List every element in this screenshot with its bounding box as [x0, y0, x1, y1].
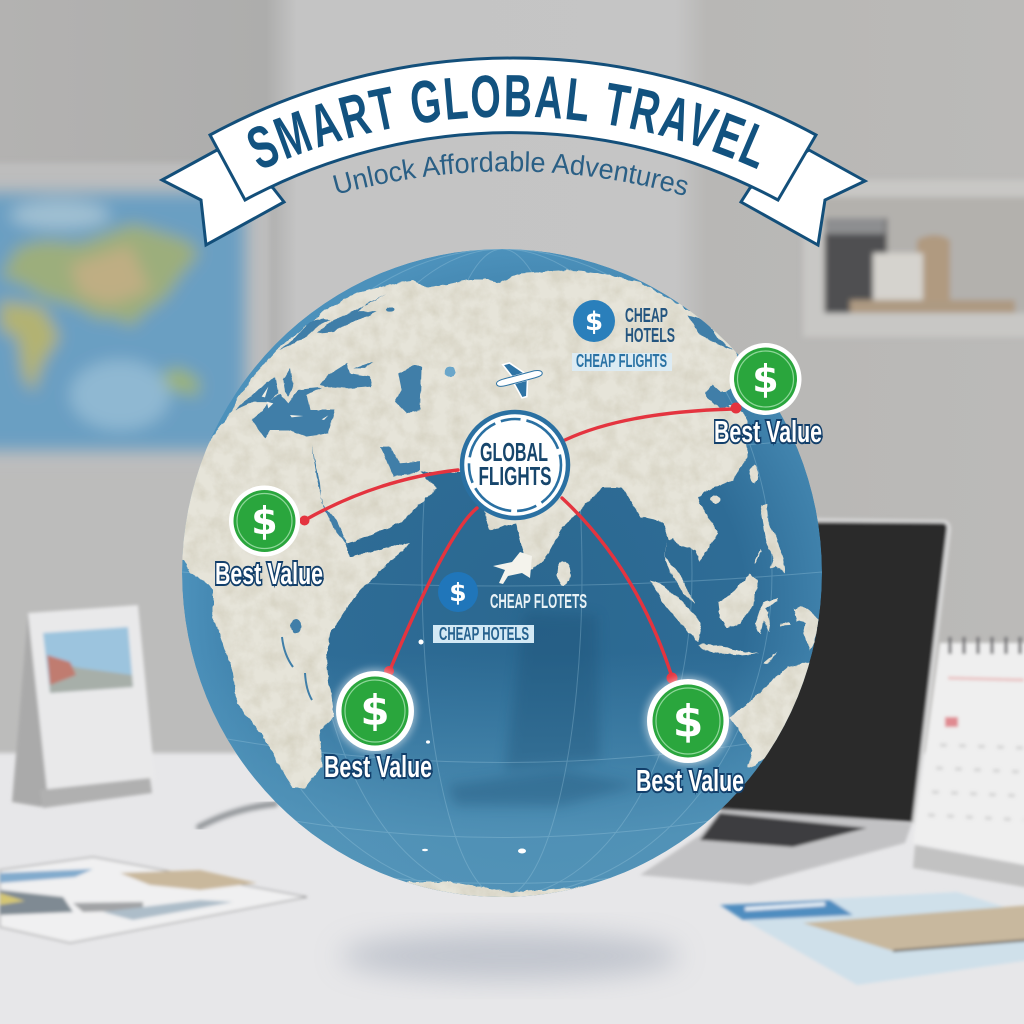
best value marker: Australia	[636, 677, 744, 798]
Africa, Europe and Asia	[150, 270, 747, 788]
upper cheap hotels callout: CHEAP	[625, 305, 668, 327]
route end dots	[300, 402, 742, 684]
inland seas	[235, 294, 733, 633]
latitude and longitude grid	[182, 249, 822, 897]
Red Sea and Persian Gulf	[312, 367, 456, 547]
lower left wall	[0, 470, 300, 770]
ocean	[182, 249, 822, 897]
ribbon left tail	[162, 150, 284, 245]
floor shadow under globe	[340, 932, 680, 980]
upper cheap hotels callout	[573, 300, 675, 347]
best value marker: East Asia: Best Value	[714, 414, 822, 449]
ribbon band	[210, 58, 816, 200]
Sri Lanka	[557, 561, 570, 585]
right desk calendar	[913, 637, 1024, 888]
lower cheap hotels chip	[433, 624, 534, 644]
best value marker: Africa	[215, 486, 323, 591]
wall map in frame	[0, 163, 270, 473]
globe	[182, 249, 823, 897]
desk surface	[0, 753, 1024, 1024]
lower cheap flights callout: $	[449, 578, 467, 607]
hub badge: Global Flights	[462, 412, 568, 518]
upper cheap flights chip: CHEAP FLIGHTS	[576, 351, 667, 371]
subtitle: Unlock Affordable Adventures	[333, 151, 688, 196]
best value marker: Africa: Best Value	[215, 556, 323, 591]
wall shelf	[803, 180, 1024, 337]
continents	[182, 270, 819, 897]
hub badge: Global Flights: FLIGHTS	[478, 461, 552, 491]
lower cheap hotels chip: CHEAP HOTELS	[439, 624, 529, 644]
best value marker: Africa: $	[251, 499, 278, 543]
left magazines	[0, 857, 307, 943]
upper cheap hotels callout: HOTELS	[625, 325, 675, 347]
Antarctic coast	[385, 882, 625, 910]
desk reflection through the globe	[448, 613, 640, 806]
plane icon	[492, 355, 547, 403]
right magazines	[718, 892, 1024, 985]
pen on desk	[199, 804, 275, 827]
Australia	[730, 660, 850, 768]
best value marker: East Asia: $	[752, 357, 779, 401]
title: SMART GLOBAL TRAVEL	[248, 75, 760, 169]
best value marker: Australia: Best Value	[636, 763, 744, 798]
best value marker: East Asia	[714, 343, 822, 449]
small islands	[418, 640, 526, 854]
lower cheap flights callout	[438, 572, 587, 613]
rift lakes	[282, 637, 312, 700]
East African lakes	[291, 619, 301, 633]
laptop	[640, 518, 951, 885]
best value marker: Indian Ocean	[324, 669, 432, 784]
Taiwan	[750, 465, 758, 483]
hub badge: Global Flights: GLOBAL	[480, 437, 548, 467]
upper cheap flights chip	[572, 351, 672, 371]
Mediterranean islands	[262, 387, 328, 420]
best value marker: Australia: $	[673, 696, 703, 747]
lower cheap flights callout: CHEAP FLOTETS	[490, 591, 587, 613]
title ribbon	[159, 56, 868, 248]
Sea of Okhotsk	[688, 315, 733, 350]
upper cheap hotels callout: $	[585, 307, 603, 337]
best value marker: Indian Ocean: $	[360, 686, 390, 735]
ribbon right tail	[741, 150, 865, 245]
flight routes	[305, 409, 733, 677]
best value marker: Indian Ocean: Best Value	[324, 749, 432, 784]
Southeast Asia islands	[650, 495, 818, 663]
left desk calendar	[12, 605, 155, 808]
India tip highlight	[493, 552, 532, 584]
Bohai Sea	[705, 385, 730, 408]
Europe and Middle East seas	[235, 294, 422, 438]
